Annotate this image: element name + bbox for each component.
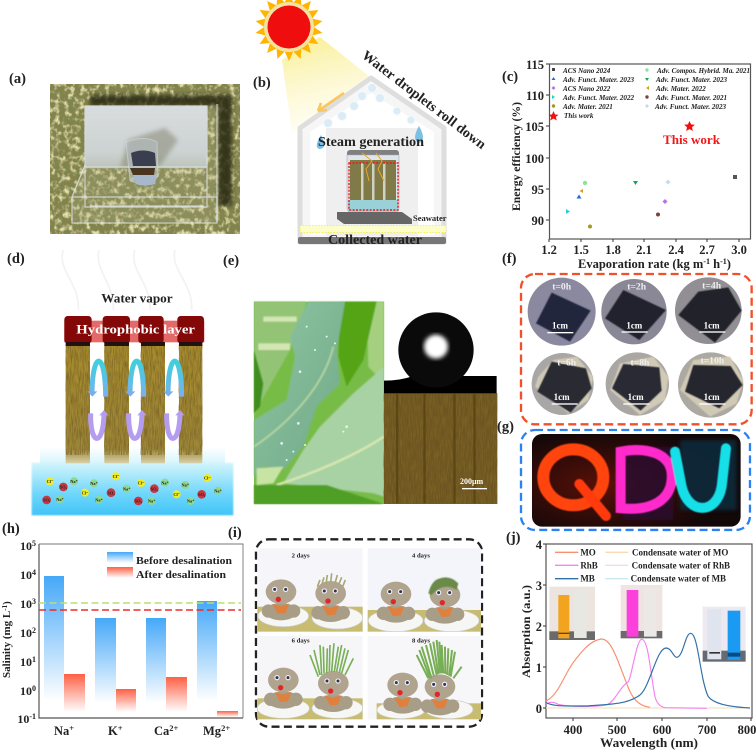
ions: Cl⁻ [204, 476, 211, 481]
sample t=4h [675, 277, 742, 344]
panel label (i): (i) [228, 525, 242, 541]
label: Water droplets roll down: Water droplets roll down [359, 48, 488, 153]
x axis title: -1 [703, 257, 710, 266]
photo: 4 days: 4 days [412, 552, 430, 559]
y ticks: 10 [20, 655, 32, 669]
y ticks [536, 538, 543, 716]
legend: ACS Nano 2022 [562, 85, 611, 93]
chart: salinity bars: Before desalination [136, 556, 232, 567]
legend: MO [580, 548, 596, 558]
y ticks: 0 [32, 684, 36, 693]
spectra [546, 706, 750, 710]
label: This work: This work [663, 133, 720, 147]
y ticks: 10 [20, 684, 32, 698]
x labels: Mg [203, 724, 221, 738]
chart: energy efficiency vs evaporation rate [509, 58, 750, 271]
beaker with fibers [347, 150, 399, 213]
y axis title: Absorption (a.u.) [519, 585, 533, 678]
x labels: + [69, 723, 74, 733]
x axis title: h [710, 257, 720, 271]
ions: SO₄ [60, 485, 68, 490]
y ticks: 2 [536, 620, 542, 634]
x ticks: 800 [738, 723, 756, 737]
ions: SO₄ [43, 498, 51, 503]
y ticks: 10 [20, 597, 32, 611]
x axis labels: 2.7 [699, 243, 715, 257]
photo: 4 days [368, 548, 481, 632]
collected water [300, 226, 446, 232]
legend: Condensate water of RhB [632, 561, 730, 571]
ions: SO₄ [198, 492, 206, 497]
panel label (a): (a) [9, 71, 26, 87]
light beam [282, 37, 370, 133]
y ticks: 3 [32, 597, 36, 606]
photo: 6 days: 6 days [292, 637, 310, 644]
fibers [66, 345, 202, 463]
y axis labels: 115 [526, 58, 544, 72]
y axis labels: 100 [525, 152, 544, 166]
panel label (c): (c) [502, 69, 518, 85]
threshold lines [39, 602, 241, 604]
ions: Na⁺ [161, 480, 169, 485]
ions: Na⁺ [95, 497, 103, 502]
x labels: Ca [154, 724, 169, 738]
photo: 2 days: 2 days [292, 553, 310, 560]
y ticks: 1 [32, 655, 36, 664]
x axis labels [541, 243, 747, 257]
ions: Na⁺ [56, 497, 64, 502]
ions: Na⁺ [187, 499, 194, 504]
photo: 2 days [257, 548, 363, 632]
panel: QDU neon [521, 430, 750, 530]
photo: contact angle and wood [384, 312, 497, 504]
x axis labels: 1.5 [573, 243, 589, 257]
y axis labels: 105 [525, 120, 544, 134]
y axis title: Energy efficiency (%) [509, 102, 523, 211]
panel label (g): (g) [497, 419, 514, 435]
legend [548, 67, 750, 120]
sample t=0h [528, 278, 596, 346]
photo: greenhouse on grass [50, 84, 240, 234]
sample t=10h: 1cm [704, 392, 720, 402]
hydrophobic layer: Hydrophobic layer [76, 322, 195, 336]
label: Water vapor: Water vapor [101, 292, 173, 306]
x labels [54, 723, 230, 738]
legend: MB [580, 574, 595, 584]
panel: greenhouse diagram [255, 0, 488, 248]
sample t=8h [606, 352, 669, 416]
y axis labels: 110 [526, 89, 544, 103]
bars before [44, 576, 217, 703]
x axis title: Evaporation rate (kg m [578, 257, 703, 271]
y ticks: 0 [536, 702, 542, 716]
hot plate [337, 212, 412, 224]
sample t=6h: 1cm [554, 392, 570, 402]
sample t=8h: t=8h [631, 357, 650, 368]
y ticks: 4 [536, 538, 543, 552]
arrow: droplet direction [318, 93, 344, 111]
photo: 6 days [257, 636, 363, 719]
x labels: + [118, 723, 123, 733]
x ticks: 500 [608, 723, 626, 737]
ions [42, 472, 222, 505]
x ticks: 700 [698, 723, 716, 737]
ions: SO₄ [135, 499, 143, 504]
label: Collected water: Collected water [328, 233, 422, 248]
legend: RhB [580, 561, 598, 571]
y ticks: 10 [17, 712, 29, 726]
inset: RhB cuvettes [621, 585, 662, 638]
x axis labels: 3.0 [731, 243, 747, 257]
legend: Adv. Funct. Mater. 2021 [655, 94, 727, 102]
vapor wisps [62, 250, 192, 310]
ions: Cl⁻ [173, 492, 180, 497]
x ticks: 600 [653, 723, 671, 737]
ions: Na⁺ [70, 479, 78, 484]
panel label (d): (d) [7, 251, 25, 267]
panel label (h): (h) [2, 521, 20, 537]
chart: salinity bars: After desalination [136, 570, 226, 581]
label: Seawater: Seawater [413, 213, 447, 223]
legend: Adv. Funct. Mater. 2022 [562, 94, 635, 102]
arrows: water circulation [87, 361, 185, 438]
ions: Cl⁻ [113, 474, 119, 479]
ions: SO₄ [107, 490, 115, 495]
x axis labels: 2.1 [636, 243, 652, 257]
data points [566, 121, 737, 228]
label: Steam generation: Steam generation [318, 135, 424, 150]
y ticks: -1 [29, 712, 36, 721]
y axis title: ) [1, 601, 13, 605]
ions: SO₄ [151, 486, 159, 491]
ions: Na⁺ [182, 483, 189, 488]
x axis labels: 1.8 [605, 243, 621, 257]
legend: This work [564, 112, 594, 120]
ions: Na⁺ [90, 481, 98, 486]
sample t=4h: 1cm [704, 320, 720, 330]
chart: salinity bars [1, 539, 243, 738]
legend: Condensate water of MO [632, 548, 728, 558]
x axis title: ) [727, 257, 731, 271]
legend: Adv. Mater. 2022 [655, 85, 706, 93]
ions: Na⁺ [123, 486, 130, 491]
panel label (j): (j) [506, 530, 521, 546]
panel: grass growth photos [256, 539, 482, 727]
inset: MO cuvettes [549, 587, 595, 640]
ions: Na⁺ [148, 499, 155, 504]
sample t=2h: t=2h [627, 281, 647, 292]
y ticks [17, 539, 36, 726]
y ticks: 10 [20, 568, 32, 582]
icon: sun [255, 0, 323, 61]
panel label (e): (e) [223, 253, 239, 269]
legend: Adv. Funct. Mater. 2023 [654, 103, 727, 111]
bars after [64, 674, 238, 717]
y ticks: 5 [32, 539, 36, 548]
sample t=0h: t=0h [552, 281, 572, 292]
x labels: Na [54, 724, 69, 738]
legend: Adv. Compos. Hybrid. Ma. 2021 [656, 67, 750, 75]
sample t=10h [678, 352, 743, 418]
legend: Condensate water of MB [631, 574, 726, 584]
y ticks: 2 [32, 626, 36, 635]
legend: Adv. Funct. Mater. 2023 [562, 76, 635, 84]
droplets on roof [324, 84, 415, 128]
photo: leaves with droplets [254, 302, 384, 504]
legend: ACS Nano 2024 [562, 67, 611, 75]
x ticks [564, 723, 756, 737]
inset: MB cuvettes [703, 607, 746, 662]
sample t=10h: t=10h [700, 355, 725, 366]
sample t=2h: 1cm [626, 320, 643, 330]
y axis labels: 90 [532, 214, 544, 228]
y ticks: 3 [536, 579, 542, 593]
house shell [300, 78, 444, 242]
ions: Na⁺ [214, 488, 222, 493]
panel: salt time series [521, 274, 752, 424]
panel label (b): (b) [253, 75, 271, 91]
seawater [40, 447, 225, 467]
y ticks: 4 [32, 568, 36, 577]
ions: Cl⁻ [82, 490, 88, 495]
x labels: K [108, 724, 118, 738]
x labels: 2+ [221, 723, 230, 733]
panel: hydrophobic layer fibers [32, 250, 233, 515]
x axis title: -1 [720, 257, 727, 266]
x axis labels: 1.2 [541, 243, 557, 257]
legend: Adv. Funct. Mater. 2023 [655, 76, 728, 84]
sample t=0h: 1cm [552, 320, 568, 330]
ions: Cl⁻ [138, 481, 144, 486]
y axis labels [525, 58, 544, 228]
hydrophobic layer [64, 316, 204, 346]
sample t=6h: t=6h [557, 357, 577, 368]
y ticks: 10 [20, 626, 32, 640]
x axis labels: 2.4 [668, 243, 685, 257]
scale bar: 200μm [460, 477, 483, 486]
chart: absorption spectra [519, 538, 756, 750]
y ticks: 1 [536, 661, 542, 675]
photo: 8 days [368, 636, 481, 719]
legend [555, 548, 730, 584]
ions: Cl⁻ [47, 479, 53, 484]
legend [107, 552, 133, 563]
legend: Adv. Mater. 2021 [562, 103, 613, 111]
x ticks: 400 [564, 723, 582, 737]
y axis title: Salinity (mg L [1, 611, 13, 678]
sample t=6h [532, 353, 594, 415]
sample t=8h: 1cm [628, 392, 644, 402]
y ticks: 10 [20, 539, 32, 553]
sample t=4h: t=4h [702, 281, 722, 292]
y axis title: -1 [1, 604, 9, 611]
x labels: 2+ [169, 723, 179, 733]
panel label (f): (f) [502, 251, 517, 267]
y axis labels: 95 [532, 183, 544, 197]
x axis title: Wavelength (nm) [600, 736, 698, 750]
sample t=2h [601, 279, 667, 344]
photo: 8 days: 8 days [412, 637, 430, 644]
